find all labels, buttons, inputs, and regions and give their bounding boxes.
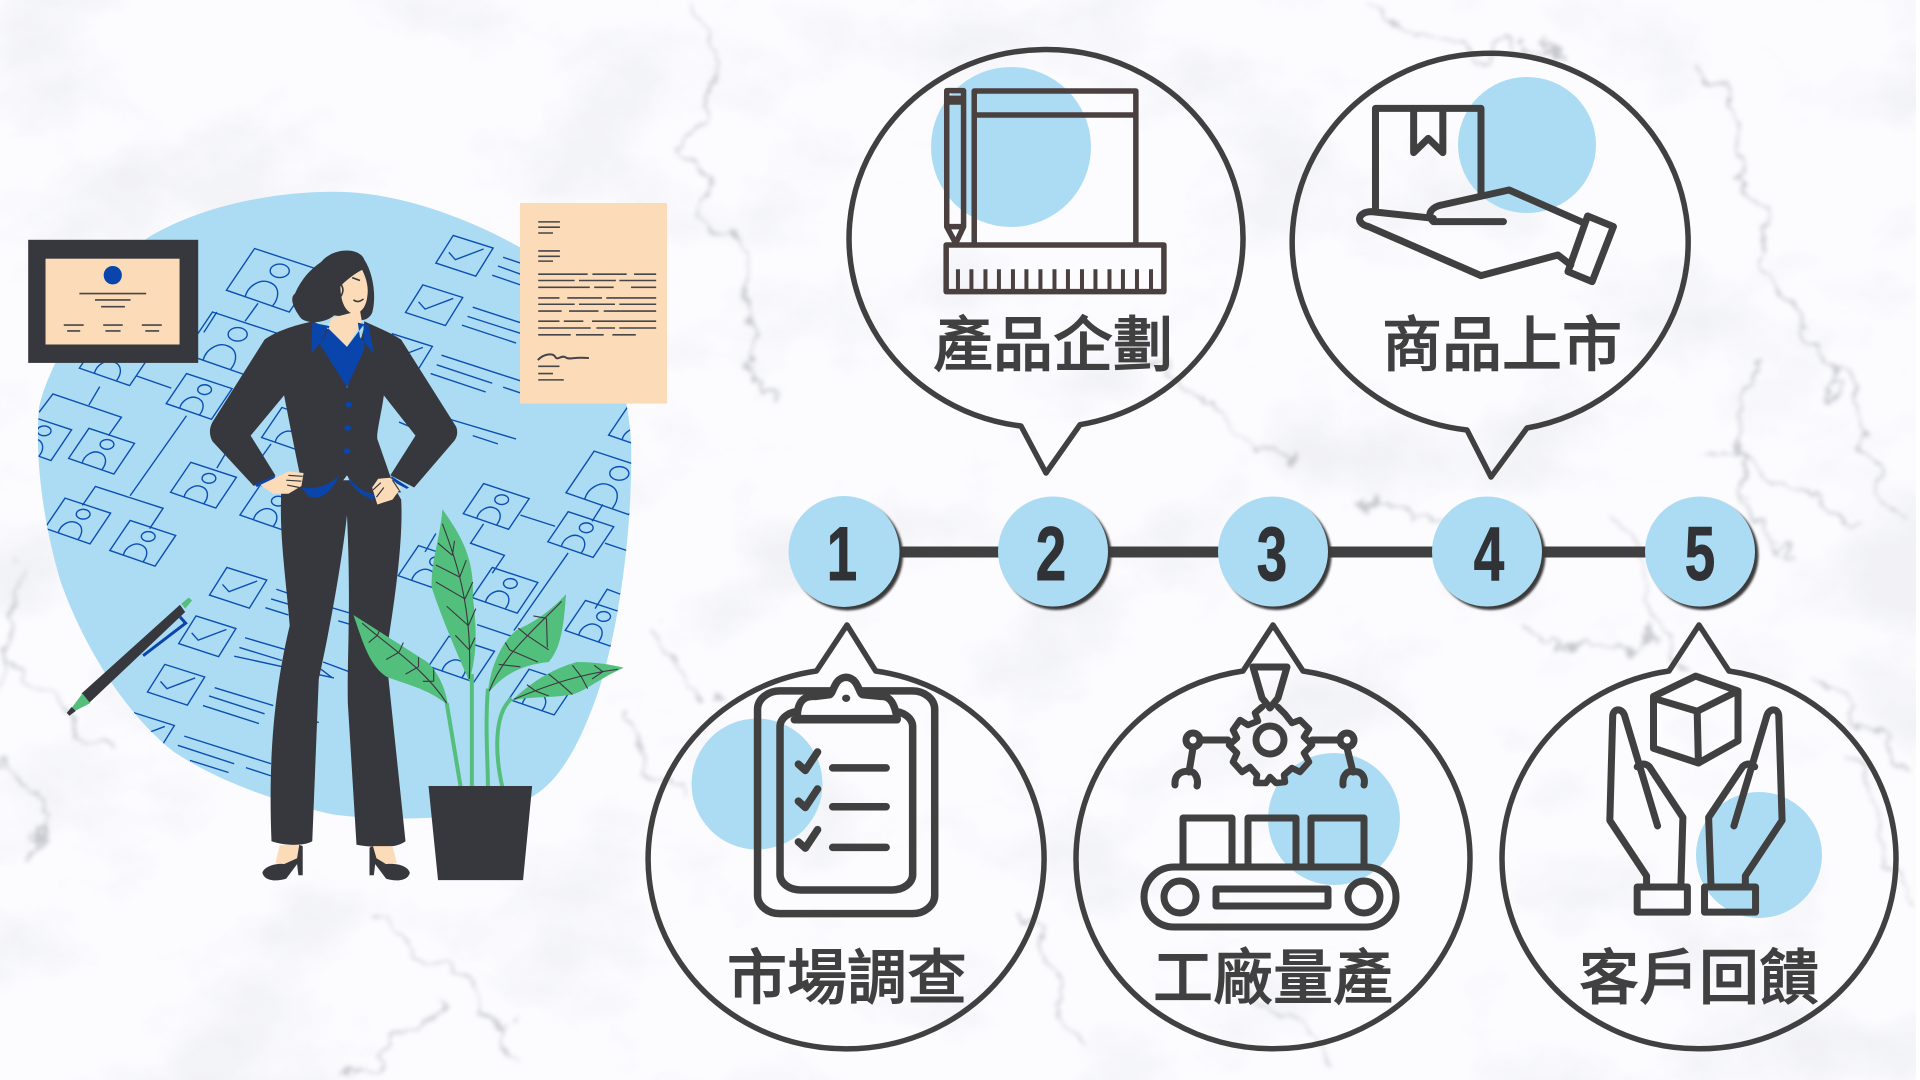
- step 5 marker: 5: [1685, 512, 1715, 597]
- icon: clipboard checklist: [758, 677, 935, 914]
- pen: [67, 598, 192, 716]
- step 3 marker: [1218, 496, 1332, 610]
- panel: 商品上市: [1292, 53, 1688, 477]
- icon: factory conveyor with gear: [1144, 667, 1396, 927]
- label: 工廠量產: [1153, 945, 1393, 1012]
- panel: 客戶回饋: [1502, 625, 1896, 1049]
- step 1 marker: [788, 496, 903, 610]
- blue blob background: [38, 192, 631, 819]
- timeline connector: [844, 546, 1700, 558]
- icon: hand holding box: [1360, 108, 1613, 282]
- label: 商品上市: [1382, 312, 1622, 379]
- step 5 marker: [1645, 496, 1758, 610]
- step 1 marker: 1: [827, 512, 857, 597]
- panel: 產品企劃: [849, 50, 1243, 473]
- step 2 marker: 2: [1036, 512, 1066, 597]
- step 3 marker: 3: [1257, 512, 1287, 597]
- panel: 市場調查: [648, 625, 1044, 1049]
- panel: 工廠量產: [1076, 625, 1470, 1049]
- potted plant: [353, 509, 624, 880]
- icon: two hands and box: [1610, 676, 1782, 912]
- label: 產品企劃: [933, 312, 1173, 379]
- label: 客戶回饋: [1579, 945, 1819, 1012]
- org chart and checklist pattern: [6, 235, 674, 776]
- label: 市場調查: [727, 945, 967, 1012]
- step 4 marker: [1432, 496, 1546, 610]
- illustration: businesswoman scene: [6, 192, 674, 880]
- icon: pencil and drafting sheet: [946, 91, 1164, 292]
- document sheet: [520, 203, 667, 404]
- certificate frame: [28, 240, 198, 363]
- step 2 marker: [998, 496, 1112, 610]
- woman figure: [210, 251, 457, 880]
- step 4 marker: 4: [1474, 512, 1504, 597]
